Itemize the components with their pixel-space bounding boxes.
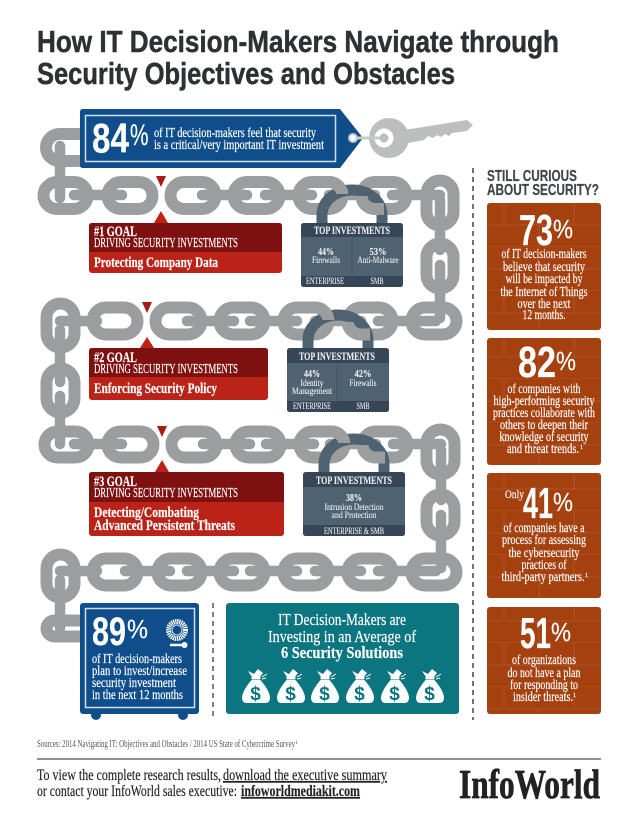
panel: 82%: knowledge of security bbox=[500, 430, 588, 445]
panel: goal 1: DRIVING SECURITY INVESTMENTS bbox=[94, 235, 238, 250]
panel: 6 security solutions: Investing in an Average of bbox=[268, 627, 416, 646]
icons: money bags: $ bbox=[250, 684, 261, 705]
heading: still curious: ABOUT SECURITY? bbox=[487, 182, 599, 199]
panel: 73%: the Internet of Things bbox=[500, 285, 588, 300]
tag: 84% stat: % bbox=[130, 119, 148, 152]
title: Security Objectives and Obstacles bbox=[37, 56, 455, 91]
tag: 84% stat bbox=[80, 109, 363, 168]
padlock 2: top investments: Identity bbox=[300, 379, 324, 389]
icons: money bags: $ bbox=[319, 684, 330, 705]
icons: money bags: $ bbox=[424, 684, 435, 705]
panel: 51%: of organizations bbox=[512, 653, 576, 668]
padlock 1: top investments: Firewalls bbox=[312, 256, 340, 266]
padlock 2: top investments: TOP INVESTMENTS bbox=[299, 349, 375, 363]
padlock 1: top investments: 53% bbox=[370, 246, 386, 258]
padlock 1: top investments: Anti-Malware bbox=[358, 256, 398, 266]
panel: 41%: process for assessing bbox=[502, 533, 586, 548]
padlock 2: top investments: Management bbox=[292, 387, 332, 397]
heading: still curious bbox=[487, 168, 599, 199]
footer call to action: infoworldmediakit.com bbox=[241, 783, 361, 800]
heading: still curious: STILL CURIOUS bbox=[487, 168, 577, 185]
panel: 73%: % bbox=[553, 214, 573, 244]
sources bbox=[37, 739, 298, 750]
footer call to action: download the executive summary bbox=[223, 767, 387, 784]
padlock 2: top investments: Firewalls bbox=[350, 379, 377, 389]
icons: money bags bbox=[242, 669, 444, 705]
panel: goal 1: Protecting Company Data bbox=[94, 255, 219, 271]
panel: 41%: % bbox=[553, 487, 573, 517]
sources: Sources: 2014 Navigating IT: Objectives and Obstacles / 2014 US State of Cybercrime Survey bbox=[37, 739, 295, 750]
goal 3 markers bbox=[155, 426, 169, 472]
padlock 2: top investments: 42% bbox=[354, 368, 372, 380]
panel: 82% bbox=[487, 338, 601, 465]
icon: safe dial bbox=[168, 622, 188, 648]
panel: safe 89%: of IT decision-makers bbox=[92, 652, 182, 667]
padlock 1: top investments: TOP INVESTMENTS bbox=[314, 223, 390, 237]
panel: safe 89%: % bbox=[127, 614, 148, 644]
panel: 82%: others to deepen their bbox=[500, 418, 588, 433]
panel: goal 2: DRIVING SECURITY INVESTMENTS bbox=[94, 361, 238, 376]
tag: 84% stat: is a critical/very important IT investment bbox=[154, 138, 324, 153]
panel: goal 1: #1 GOAL bbox=[94, 224, 137, 240]
panel: goal 2: Enforcing Security Policy bbox=[94, 381, 218, 397]
panel: 73% bbox=[487, 203, 601, 330]
panel: safe 89%: 89 bbox=[92, 610, 126, 654]
goal 2 markers bbox=[140, 302, 154, 348]
panel: 41% bbox=[487, 473, 601, 598]
panel: 51%: 51 bbox=[520, 609, 551, 658]
panel: goal 3: DRIVING SECURITY INVESTMENTS bbox=[94, 485, 238, 500]
panel: 51% bbox=[487, 607, 601, 714]
padlock 3: top investments: 38% bbox=[346, 492, 362, 504]
panel: 73%: believe that security bbox=[503, 260, 585, 275]
panel: 41%: practices of bbox=[522, 558, 567, 573]
padlock 2: top investments: SMB bbox=[356, 402, 370, 412]
panel: safe 89%: plan to invest/increase bbox=[92, 664, 187, 679]
padlock 3: top investments: Intrusion Detection bbox=[324, 503, 384, 513]
panel: 82%: 82 bbox=[518, 338, 556, 387]
footer call to action bbox=[37, 767, 387, 800]
padlock 1: top investments: 44% bbox=[318, 246, 334, 258]
footer call to action: To view the complete research results, bbox=[37, 767, 221, 784]
panel: 6 security solutions bbox=[226, 603, 459, 714]
tag: 84% stat: 84 bbox=[92, 114, 130, 162]
panel: 73%: of IT decision-makers bbox=[502, 247, 586, 262]
panel: 82%: and threat trends. bbox=[507, 442, 579, 457]
title bbox=[37, 24, 559, 91]
icons: money bags: $ bbox=[354, 684, 365, 705]
panel: 41%: of companies have a bbox=[504, 521, 585, 536]
tag: 84% stat: of IT decision-makers feel that security bbox=[154, 126, 316, 141]
panel: 82%: % bbox=[556, 346, 576, 376]
panel: 41%: the cybersecurity bbox=[508, 546, 580, 561]
icons: money bags: $ bbox=[389, 684, 400, 705]
padlock 3: top investments bbox=[300, 432, 408, 537]
padlock 1: top investments: SMB bbox=[370, 277, 384, 287]
panel: 6 security solutions: IT Decision-Makers are bbox=[278, 610, 406, 629]
panel: 73%: 73 bbox=[519, 206, 553, 255]
panel: 82%: high-performing security bbox=[494, 394, 594, 409]
padlock 2: top investments: ENTERPRISE bbox=[293, 402, 331, 412]
padlock 1: top investments: ENTERPRISE bbox=[306, 277, 344, 287]
panel: goal 3: Detecting/Combating bbox=[94, 505, 200, 521]
padlock 2: top investments: 44% bbox=[304, 368, 320, 380]
panel: 6 security solutions: 6 Security Solutions bbox=[281, 643, 403, 662]
panel: goal 1 bbox=[89, 223, 282, 273]
panel: 41%: Only bbox=[505, 487, 524, 501]
panel: 82%: 1 bbox=[580, 445, 583, 451]
panel: goal 2: #2 GOAL bbox=[94, 350, 137, 366]
panel: 82%: practices collaborate with bbox=[493, 406, 595, 421]
panel: 73%: will be impacted by bbox=[506, 272, 582, 287]
panel: 51%: % bbox=[551, 617, 571, 647]
padlock 3: top investments: TOP INVESTMENTS bbox=[316, 473, 392, 487]
panel: goal 3: Advanced Persistent Threats bbox=[94, 518, 235, 534]
panel: 73%: over the next bbox=[518, 297, 571, 312]
panel: 51%: insider threats. bbox=[513, 690, 573, 705]
panel: safe 89%: in the next 12 months bbox=[92, 688, 183, 703]
panel: 41%: third-party partners. bbox=[502, 570, 584, 585]
goal 1 markers bbox=[154, 176, 168, 223]
panel: 73%: 12 months. bbox=[522, 308, 566, 323]
sources: 1 bbox=[295, 740, 298, 746]
footer call to action: or contact your InfoWorld sales executive: bbox=[37, 783, 237, 800]
panel: goal 2 bbox=[89, 348, 268, 400]
panel: safe 89%: security investment bbox=[92, 676, 176, 691]
panel: safe 89% bbox=[80, 603, 199, 720]
icons: money bags: $ bbox=[285, 684, 296, 705]
padlock 3: top investments: and Protection bbox=[332, 511, 377, 521]
panel: goal 3 bbox=[89, 472, 284, 536]
panel: 41%: 41 bbox=[523, 479, 553, 528]
panel: 51%: for responding to bbox=[510, 678, 578, 693]
padlock 2: top investments bbox=[284, 308, 392, 412]
panel: 51%: 1 bbox=[573, 693, 576, 699]
padlock 1: top investments bbox=[298, 182, 406, 287]
panel: 51%: do not have a plan bbox=[508, 666, 580, 681]
panel: goal 3: #3 GOAL bbox=[94, 474, 137, 490]
icon: key bbox=[349, 118, 473, 158]
chain bbox=[44, 134, 456, 636]
padlock 3: top investments: ENTERPRISE & SMB bbox=[324, 527, 384, 537]
panel: 41%: 1 bbox=[585, 573, 588, 579]
panel: 82%: of companies with bbox=[508, 382, 580, 397]
